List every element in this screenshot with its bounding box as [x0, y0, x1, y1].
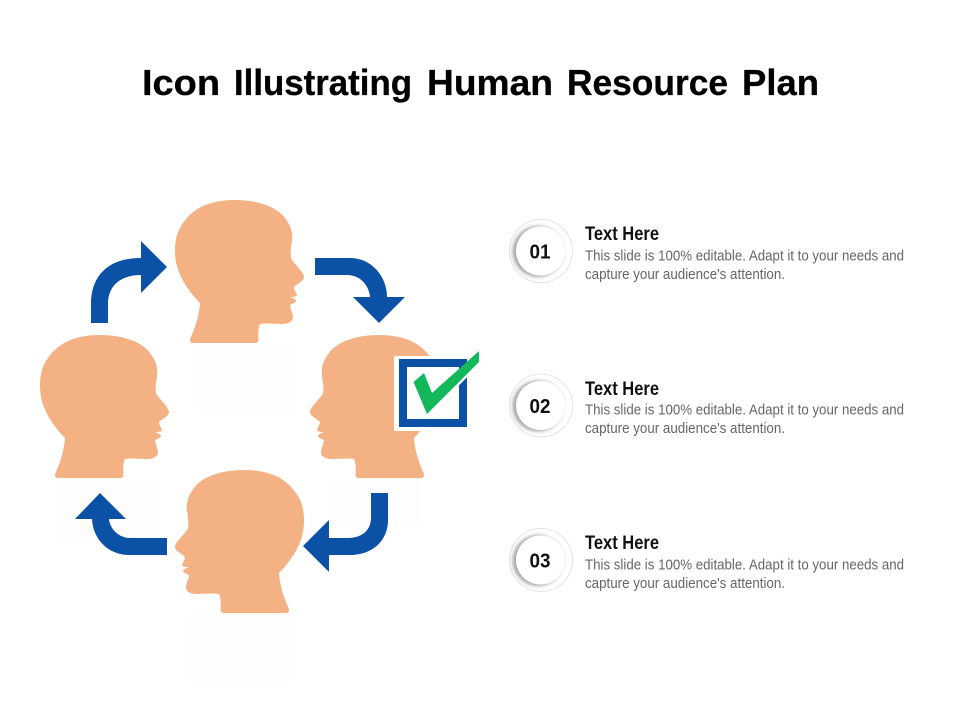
- item 02 description: capture your audience's attention.: [585, 420, 785, 437]
- number badge 03: 03: [530, 550, 550, 572]
- item 02: [510, 374, 904, 437]
- title: Resource: [567, 62, 728, 103]
- item 01 description: capture your audience's attention.: [585, 266, 785, 283]
- number badge 01: 01: [530, 242, 550, 264]
- head: left: [40, 335, 169, 478]
- item 03: [510, 528, 904, 592]
- arrow: right to bottom: [303, 493, 388, 572]
- title: Illustrating: [234, 62, 412, 103]
- item 01 heading: Text Here: [585, 224, 659, 245]
- number badge 02: [510, 374, 572, 437]
- item 01 description: This slide is 100% editable. Adapt it to your needs and: [585, 248, 904, 264]
- title: Human: [427, 62, 553, 103]
- head reflections: [58, 344, 425, 682]
- icon: checkbox with check mark: [394, 351, 479, 431]
- item 02 heading: Text Here: [585, 379, 659, 400]
- number badge 03: [510, 528, 572, 592]
- head: top: [175, 200, 304, 343]
- arrow: top to right: [315, 258, 405, 323]
- number badge 02: 02: [530, 396, 550, 418]
- item 03 description: capture your audience's attention.: [585, 575, 785, 592]
- arrow: bottom to left: [75, 493, 167, 555]
- item 01: [510, 220, 904, 283]
- item 03 heading: Text Here: [585, 533, 659, 554]
- title: Plan: [742, 62, 819, 103]
- check mark: [414, 351, 479, 414]
- head: right: [310, 335, 439, 478]
- head: bottom: [175, 470, 304, 613]
- item 02 description: This slide is 100% editable. Adapt it to your needs and: [585, 402, 904, 418]
- title: Icon: [142, 62, 220, 103]
- number badge 01: [510, 220, 572, 282]
- arrow: left to top: [91, 241, 167, 323]
- item 03 description: This slide is 100% editable. Adapt it to your needs and: [585, 556, 904, 574]
